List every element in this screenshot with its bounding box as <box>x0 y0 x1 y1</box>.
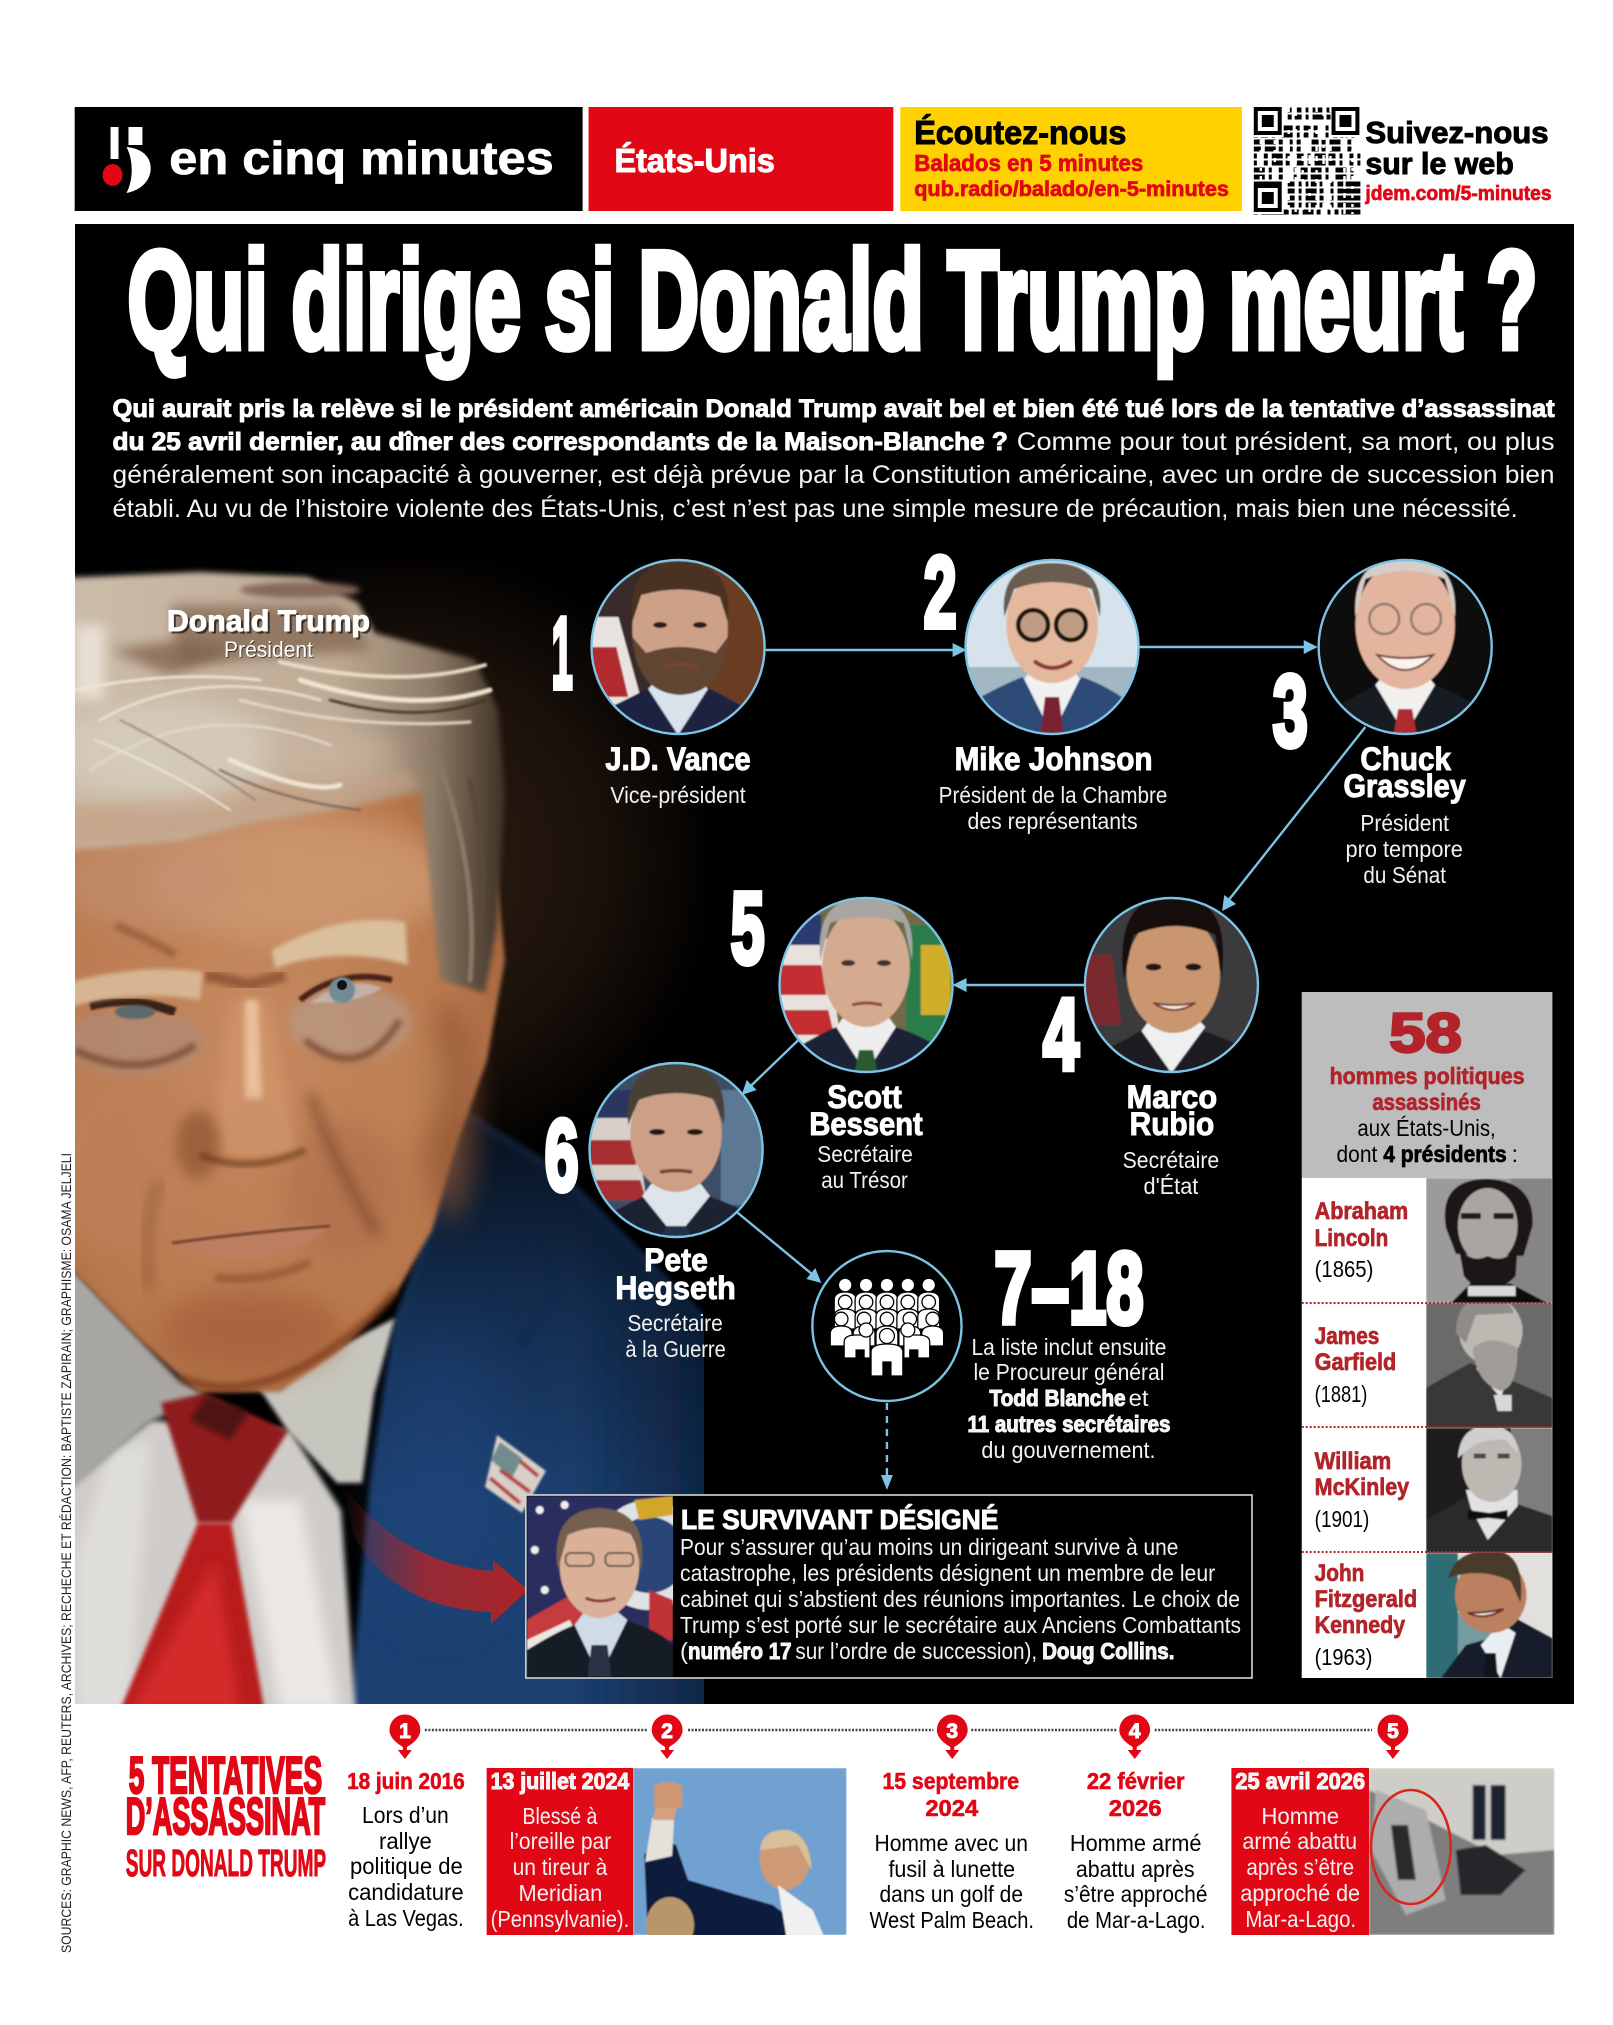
text: list: Todd Blanche <box>989 1385 1126 1411</box>
pin 5: 5 <box>1387 1720 1399 1743</box>
attempt 2: l’oreille par <box>510 1828 612 1854</box>
text: suivez-nous: jdem.com/5-minutes <box>1364 183 1552 205</box>
attempt 3: 15 septembre <box>882 1768 1019 1794</box>
eyes <box>90 1002 175 1012</box>
pin 1 <box>389 1714 420 1759</box>
intro text block <box>113 395 1555 523</box>
tie <box>161 1393 288 1523</box>
attempt 4 <box>1064 1768 1207 1933</box>
role: pro tempore <box>1345 836 1463 862</box>
person 1: J.D. Vance <box>552 557 768 808</box>
label: Donald Trump <box>167 605 372 663</box>
role <box>1123 1147 1219 1199</box>
caption: 4 présidents <box>1383 1141 1507 1167</box>
nose <box>220 1000 295 1155</box>
president: Lincoln: Abraham <box>1315 1198 1408 1225</box>
photo: Doug Collins <box>526 1496 674 1677</box>
president: Garfield: Garfield <box>1315 1349 1396 1376</box>
group 7–18 <box>812 1233 1170 1463</box>
name: Rubio <box>1130 1106 1214 1142</box>
attempt 2: un tireur à <box>513 1854 607 1880</box>
eye sockets <box>61 1010 205 1074</box>
attempt 2 <box>487 1768 847 1960</box>
heading <box>126 1747 326 1885</box>
body: Pour s’assurer qu’au moins un dirigeant survive à une <box>680 1534 1178 1560</box>
text: suivez-nous: sur le web <box>1365 146 1514 181</box>
eyebrows <box>60 969 203 1010</box>
role <box>625 1310 726 1362</box>
name: J.D. Vance <box>605 741 751 777</box>
body: Trump s’est porté sur le secrétaire aux Anciens Combattants <box>680 1612 1241 1638</box>
photo: security footage <box>1369 1768 1554 1935</box>
name: Pete <box>644 1242 708 1278</box>
president: Garfield: (1881) <box>1315 1381 1367 1407</box>
attempt 5: armé abattu <box>1242 1828 1357 1854</box>
body: catastrophe, les présidents désignent un membre de leur <box>680 1560 1216 1586</box>
main black panel <box>75 224 1574 1704</box>
president: McKinley: (1901) <box>1315 1506 1369 1532</box>
role: à la Guerre <box>625 1336 726 1362</box>
panel: logo en cinq minutes: en cinq minutes <box>169 132 554 184</box>
body: Doug Collins. <box>1042 1638 1174 1664</box>
text: list: La liste inclut ensuite <box>971 1334 1166 1360</box>
attempt 1: politique de <box>350 1853 463 1879</box>
arrows: succession chain <box>737 640 1365 1490</box>
person 6: Pete Hegseth <box>545 1060 766 1362</box>
role: du Sénat <box>1363 862 1447 888</box>
role <box>939 782 1167 834</box>
president: Lincoln <box>1315 1178 1552 1303</box>
intro text block: du 25 avril dernier, au dîner des correspondants de la Maison-Blanche ? <box>113 428 1008 456</box>
portrait <box>587 1060 766 1240</box>
portrait <box>1082 895 1261 1075</box>
label: Donald Trump: Président <box>224 637 313 662</box>
panel: Écoutez-nous: Balados en 5 minutes <box>914 150 1143 176</box>
label: Donald Trump: Donald Trump <box>170 608 372 640</box>
president: Kennedy: (1963) <box>1315 1644 1372 1670</box>
hair <box>60 572 505 993</box>
panel: Écoutez-nous: qub.radio/balado/en-5-minutes <box>914 178 1229 201</box>
panel: États-Unis <box>589 107 893 211</box>
number 3: 3 <box>1273 656 1308 768</box>
pin 2 <box>652 1714 683 1759</box>
attempt 3 <box>870 1768 1034 1933</box>
stat 58: 58 <box>1389 1001 1462 1064</box>
name <box>1344 741 1466 804</box>
name: Grassley <box>1344 768 1466 804</box>
name: Scott <box>827 1079 902 1115</box>
caption: hommes politiques <box>1330 1063 1525 1089</box>
pin 3: 3 <box>946 1720 958 1743</box>
role: Secrétaire <box>1123 1147 1219 1173</box>
attempt 3: Homme avec un <box>874 1830 1028 1856</box>
attempt 5: Homme <box>1261 1803 1339 1829</box>
mouth <box>172 1225 330 1258</box>
name: Marco <box>1127 1079 1217 1115</box>
text: suivez-nous: Suivez-nous <box>1365 115 1549 150</box>
flag pin <box>485 1435 546 1513</box>
portrait <box>1316 557 1495 737</box>
person 2: Mike Johnson <box>924 537 1167 834</box>
icon: group of people <box>812 1251 962 1401</box>
number 4: 4 <box>1043 979 1079 1091</box>
president: Lincoln: Lincoln <box>1315 1225 1388 1252</box>
pin 3 <box>937 1714 968 1759</box>
attempt 4: 2026 <box>1109 1795 1162 1821</box>
role <box>1345 810 1463 888</box>
arrow: red curved arrow to designated survivor <box>341 1483 528 1624</box>
heading: 5 TENTATIVES <box>129 1747 322 1805</box>
body <box>680 1534 1241 1664</box>
panel: 58 hommes politiques assassinés <box>1302 992 1552 1678</box>
role <box>817 1141 913 1193</box>
dotted line <box>425 1729 1372 1731</box>
number 5: 5 <box>731 873 765 985</box>
attempt 5: Mar-a-Lago. <box>1245 1906 1356 1932</box>
role: Président de la Chambre <box>939 782 1167 808</box>
portrait <box>589 557 768 737</box>
text: list <box>968 1334 1170 1463</box>
body: cabinet qui s’abstient des réunions importantes. Le choix de <box>680 1586 1240 1612</box>
person 5: Scott Bessent <box>731 873 956 1193</box>
icon: QR code <box>1254 107 1361 214</box>
attempt 1: 18 juin 2016 <box>347 1768 465 1794</box>
panel: États-Unis: États-Unis <box>614 142 775 179</box>
president: Kennedy: Fitzgerald <box>1315 1586 1417 1613</box>
intro text block: Qui aurait pris la relève si le président américain Donald Trump avait bel et bien été tué lors de la tentative d’assassinat <box>113 395 1555 423</box>
intro text block: généralement son incapacité à gouverner, est déjà prévue par la Constitution américaine, avec un ordre de succession bien <box>113 461 1555 489</box>
intro text block: Comme pour tout président, sa mort, ou plus <box>1017 428 1555 456</box>
attempt 5: après s’être <box>1246 1854 1354 1880</box>
body: numéro 17 <box>688 1638 791 1664</box>
body: sur l’ordre de succession), <box>795 1638 1037 1664</box>
attempt 1: rallye <box>379 1828 432 1854</box>
role: des représentants <box>968 808 1138 834</box>
text: suivez-nous <box>1364 115 1552 205</box>
panel: Écoutez-nous <box>900 107 1242 211</box>
attempt 3: fusil à lunette <box>888 1856 1015 1882</box>
person 4: Marco Rubio <box>1043 895 1261 1199</box>
attempt 2: Blessé à <box>523 1803 598 1829</box>
role: Vice-président <box>610 782 746 808</box>
caption: : <box>1512 1141 1518 1167</box>
president: Kennedy: Kennedy <box>1315 1612 1406 1639</box>
president: McKinley: McKinley <box>1315 1474 1410 1501</box>
number 7–18: 7–18 <box>994 1233 1144 1345</box>
role: d'État <box>1144 1173 1199 1199</box>
pin 5 <box>1377 1714 1408 1759</box>
name: Hegseth <box>615 1270 736 1306</box>
timeline: 5 tentatives d'assassinat <box>126 1714 1554 1960</box>
face <box>60 760 505 1392</box>
dotted separators <box>1302 1303 1552 1552</box>
shirt <box>75 1417 360 1704</box>
president: Garfield: James <box>1315 1323 1379 1350</box>
number 6: 6 <box>545 1100 579 1212</box>
role: Secrétaire <box>817 1141 913 1167</box>
photo <box>1426 1551 1552 1678</box>
president: Garfield <box>1315 1297 1552 1428</box>
heading: SUR DONALD TRUMP <box>126 1843 326 1885</box>
pin 4 <box>1119 1714 1150 1759</box>
portrait <box>777 895 956 1075</box>
president: McKinley: William <box>1315 1448 1391 1475</box>
photo: Donald Trump portrait <box>50 540 760 1760</box>
attempt 5: 25 avril 2026 <box>1235 1768 1365 1794</box>
caption <box>1330 1063 1525 1167</box>
label: Donald Trump: Président <box>225 638 314 663</box>
attempt 4: abattu après <box>1076 1856 1195 1882</box>
role: Président <box>1360 810 1450 836</box>
photo: Trump raised fist <box>633 1768 847 1960</box>
portrait <box>963 557 1142 737</box>
name: Bessent <box>809 1106 923 1142</box>
attempt 1 <box>347 1768 465 1931</box>
label: Donald Trump: Donald Trump <box>167 605 370 638</box>
panel: logo en cinq minutes <box>75 107 583 211</box>
caption: dont <box>1337 1141 1378 1167</box>
panel: le survivant désigné <box>526 1495 1252 1678</box>
text: list: du gouvernement. <box>981 1437 1156 1463</box>
attempt 4: de Mar-a-Lago. <box>1067 1907 1205 1933</box>
header bar <box>75 107 1552 214</box>
panel: Écoutez-nous: Écoutez-nous <box>914 114 1126 151</box>
chin <box>180 1290 395 1387</box>
caption: assassinés <box>1372 1089 1481 1115</box>
sources credit: SOURCES: GRAPHIC NEWS, AFP, REUTERS, ARCHIVES; RECHECHE ET RÉDACTION: BAPTISTE ZAPIRAIN; GRAPHISME: OSAMA JELJELI <box>58 1153 74 1953</box>
attempt 1: candidature <box>348 1879 464 1905</box>
heading: D’ASSASSINAT <box>126 1788 325 1846</box>
attempt 2: (Pennsylvanie). <box>491 1906 629 1932</box>
photo <box>1426 1426 1552 1553</box>
attempt 3: dans un golf de <box>879 1881 1023 1907</box>
name <box>1127 1079 1217 1142</box>
text: list: le Procureur général <box>973 1359 1164 1385</box>
heading: LE SURVIVANT DÉSIGNÉ <box>681 1504 998 1535</box>
president: Kennedy: John <box>1315 1560 1364 1587</box>
person 3: Chuck Grassley <box>1273 557 1495 888</box>
attempt 2: 13 juillet 2024 <box>491 1768 629 1794</box>
suit <box>351 1112 704 1704</box>
name <box>809 1079 923 1142</box>
body: ( <box>680 1638 688 1664</box>
attempt 4: s’être approché <box>1064 1881 1207 1907</box>
attempt 1: à Las Vegas. <box>348 1905 464 1931</box>
pin 4: 4 <box>1129 1720 1141 1743</box>
attempt 4: Homme armé <box>1070 1830 1202 1856</box>
attempt 5 <box>1231 1768 1554 1935</box>
person 1: J.D. Vance: 1 <box>552 598 573 710</box>
intro text block: établi. Au vu de l’histoire violente des États-Unis, c’est n’est pas une simple mesure de précaution, mais bien une nécessité. <box>113 494 1518 523</box>
pin 2: 2 <box>661 1720 673 1743</box>
name <box>615 1242 736 1306</box>
name: Mike Johnson <box>955 741 1153 777</box>
text: list: 11 autres secrétaires <box>968 1411 1170 1437</box>
president: McKinley <box>1315 1426 1552 1553</box>
forehead frown <box>115 925 175 955</box>
photo <box>1426 1178 1552 1303</box>
attempt 1: Lors d’un <box>362 1802 449 1828</box>
number 2: 2 <box>924 537 957 649</box>
name: Chuck <box>1360 741 1451 777</box>
attempt 3: West Palm Beach. <box>870 1907 1034 1933</box>
attempt 3: 2024 <box>925 1795 978 1821</box>
role: au Trésor <box>821 1167 908 1193</box>
pin 1: 1 <box>399 1720 411 1743</box>
role: Secrétaire <box>627 1310 723 1336</box>
text: list: et <box>1129 1385 1149 1411</box>
attempt 2: Meridian <box>519 1880 602 1906</box>
collars <box>75 1270 206 1490</box>
president: Lincoln: (1865) <box>1315 1256 1373 1282</box>
caption: aux États-Unis, <box>1357 1115 1496 1141</box>
photo <box>1426 1297 1552 1428</box>
attempt 5: approché de <box>1240 1880 1360 1906</box>
president: Kennedy <box>1315 1551 1552 1678</box>
attempt 4: 22 février <box>1087 1768 1185 1794</box>
